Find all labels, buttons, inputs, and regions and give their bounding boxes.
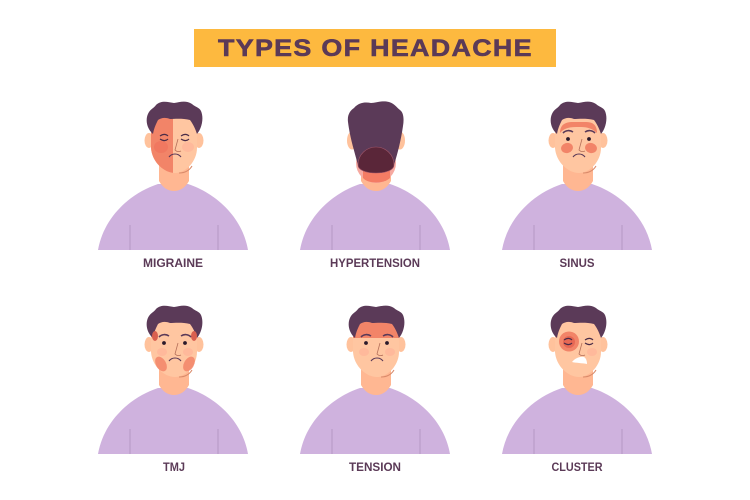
- label: TMJ: TMJ: [163, 460, 185, 474]
- panel: cluster: [502, 306, 652, 474]
- label: tension: TENSION: [349, 460, 401, 474]
- panel: sinus: [502, 102, 652, 270]
- title: TYPES OF HEADACHE: [218, 35, 532, 62]
- panel: hypertension: [300, 101, 450, 270]
- label: migraine: MIGRAINE: [143, 256, 203, 270]
- label: hypertension: HYPERTENSION: [330, 256, 420, 270]
- label: sinus: SINUS: [560, 256, 594, 270]
- title: [194, 29, 556, 67]
- panel: tension: [300, 306, 450, 474]
- label: cluster: CLUSTER: [552, 460, 603, 474]
- panel: TMJ: [98, 306, 248, 474]
- panel: migraine: [98, 102, 248, 270]
- icon: clenched teeth: [572, 357, 587, 364]
